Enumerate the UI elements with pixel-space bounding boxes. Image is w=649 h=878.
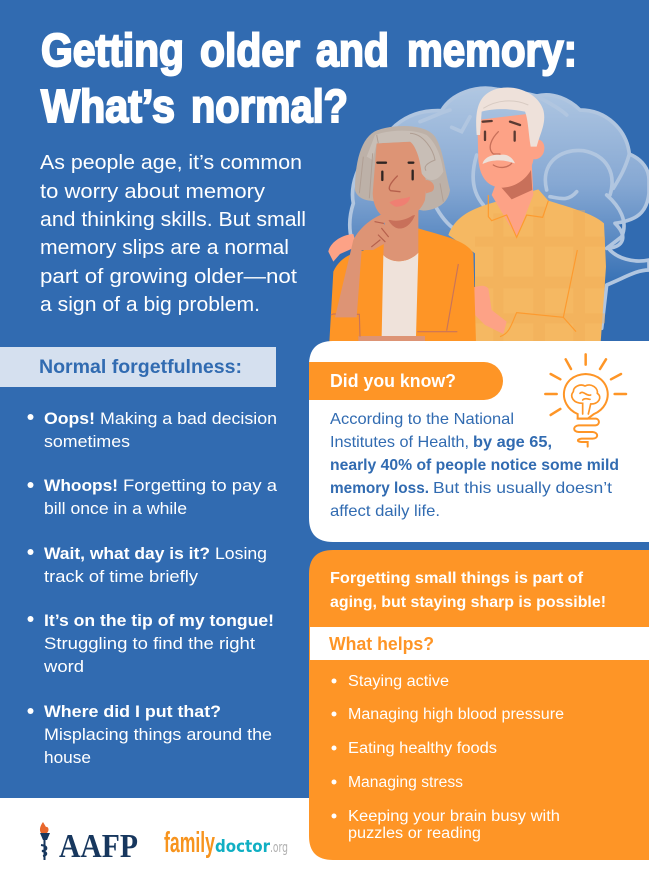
intro text: to worry about memory: [40, 180, 266, 203]
callout text: aging, but staying sharp is possible!: [330, 594, 606, 611]
brain outline: [350, 88, 649, 328]
item: whoops: Whoops!: [44, 476, 118, 495]
intro text: part of growing older—not: [40, 265, 297, 288]
body text: According to the National: [330, 411, 514, 428]
pill heading: Did you know?: [330, 371, 456, 391]
panel background: [309, 341, 649, 542]
section heading: Normal forgetfulness:: [39, 357, 242, 378]
finger lines: [372, 222, 388, 247]
woman hand and forearm: [335, 211, 396, 317]
woman head: [373, 142, 427, 221]
woman hair front: [367, 131, 443, 180]
man head: [477, 113, 533, 188]
item: oops: Making a bad decision: [100, 409, 277, 428]
man hand at arm: [467, 286, 507, 334]
shirt: [448, 189, 606, 342]
item: what day: Losing: [215, 544, 267, 563]
item: oops: Oops!: [44, 409, 95, 428]
intro text: As people age, it’s common: [40, 151, 302, 174]
panel: what helps: [309, 550, 649, 860]
neck shadow: [500, 170, 532, 199]
item: whoops: Forgetting to pay a: [123, 476, 278, 495]
title: normal?: [191, 80, 348, 132]
title: Getting: [41, 24, 184, 76]
man moustache: [483, 155, 515, 164]
what helps heading: [310, 627, 649, 660]
body text: [330, 411, 619, 520]
callout text: Forgetting small things is part of: [330, 570, 584, 587]
jacket: [329, 228, 476, 342]
logo: familydoctor.org: family: [164, 827, 215, 859]
orange background: [309, 550, 649, 860]
neck shadow: [388, 215, 415, 229]
collar lines: [488, 195, 577, 337]
item: where did I put that: house: [44, 748, 91, 767]
item: what day: [28, 544, 267, 586]
man face: [483, 121, 520, 141]
neck: [492, 162, 533, 237]
section heading: [0, 347, 276, 387]
woman lips: [389, 197, 410, 207]
logo: AAFP: [40, 822, 138, 865]
callout text: [330, 570, 606, 611]
helps list: Managing stress: [348, 774, 463, 791]
item: tip of tongue: It’s on the tip of my tongue!: [44, 611, 274, 630]
item: where did I put that: [28, 702, 272, 767]
title: and: [316, 24, 389, 76]
what helps heading: What helps?: [329, 634, 434, 654]
helps list: Keeping your brain busy with: [348, 808, 560, 825]
woman hem: [358, 336, 425, 342]
helps list: puzzles or reading: [348, 825, 481, 842]
woman face: [377, 163, 413, 180]
footer band: [0, 798, 649, 878]
helps list: Staying active: [348, 673, 449, 690]
item: oops: sometimes: [44, 432, 130, 451]
body text: affect daily life.: [330, 503, 440, 520]
man ear: [532, 139, 544, 159]
item: whoops: [28, 476, 278, 518]
item: what day: track of time briefly: [44, 567, 199, 586]
icon: torch: [40, 822, 50, 860]
illustration: couple in front of brain: [328, 87, 649, 342]
body text: memory loss.: [330, 480, 429, 497]
title: [41, 24, 577, 132]
icon: light bulb with brain: [545, 354, 626, 447]
title: older: [200, 24, 300, 76]
panel: did you know: [309, 341, 649, 542]
item: where did I put that: Misplacing things around the: [44, 725, 272, 744]
helps list: [332, 673, 564, 842]
inner top: [382, 253, 418, 337]
title: What’s: [41, 80, 175, 132]
body text: by age 65,: [473, 434, 552, 451]
intro text: a sign of a big problem.: [40, 293, 260, 316]
logo: familydoctor.org: doctor: [215, 837, 271, 857]
helps list: Managing high blood pressure: [348, 706, 564, 723]
label pill: [309, 362, 503, 400]
title: memory:: [407, 24, 577, 76]
helps list: Eating healthy foods: [348, 740, 497, 757]
intro text: [40, 151, 306, 316]
intro text: memory slips are a normal: [40, 236, 289, 259]
woman ear: [426, 180, 434, 193]
item: whoops: bill once in a while: [44, 499, 187, 518]
woman nose: [389, 176, 400, 192]
item: tip of tongue: Struggling to find the right: [44, 634, 255, 653]
man hair: [476, 87, 544, 147]
body text: nearly 40% of people notice some mild: [330, 457, 619, 474]
item: what day: Wait, what day is it?: [44, 544, 210, 563]
woman neck: [383, 207, 418, 261]
brain inner folds: [420, 96, 629, 248]
item: where did I put that: Where did I put that?: [44, 702, 221, 721]
man nose: [490, 132, 512, 167]
logo: familydoctor.org: .org: [270, 840, 288, 856]
hair strands: [359, 133, 443, 202]
item: oops: [28, 409, 277, 451]
intro text: and thinking skills. But small: [40, 208, 306, 231]
man: neck and body: [328, 87, 606, 342]
item: tip of tongue: [28, 611, 274, 676]
body text: Institutes of Health,: [330, 434, 469, 451]
logo: AAFP: AAFP: [59, 828, 138, 865]
shirt plaid: [475, 207, 605, 342]
panel: normal forgetfulness: [0, 347, 278, 767]
jacket seams: [331, 264, 458, 337]
woman hair back: [355, 126, 450, 211]
man hand on shoulder: [328, 234, 357, 262]
logo: familydoctor.org: [164, 827, 288, 859]
item: tip of tongue: word: [43, 657, 84, 676]
woman: [329, 126, 476, 342]
body text: But this usually doesn’t: [433, 480, 613, 497]
man hair strands: [483, 101, 528, 108]
